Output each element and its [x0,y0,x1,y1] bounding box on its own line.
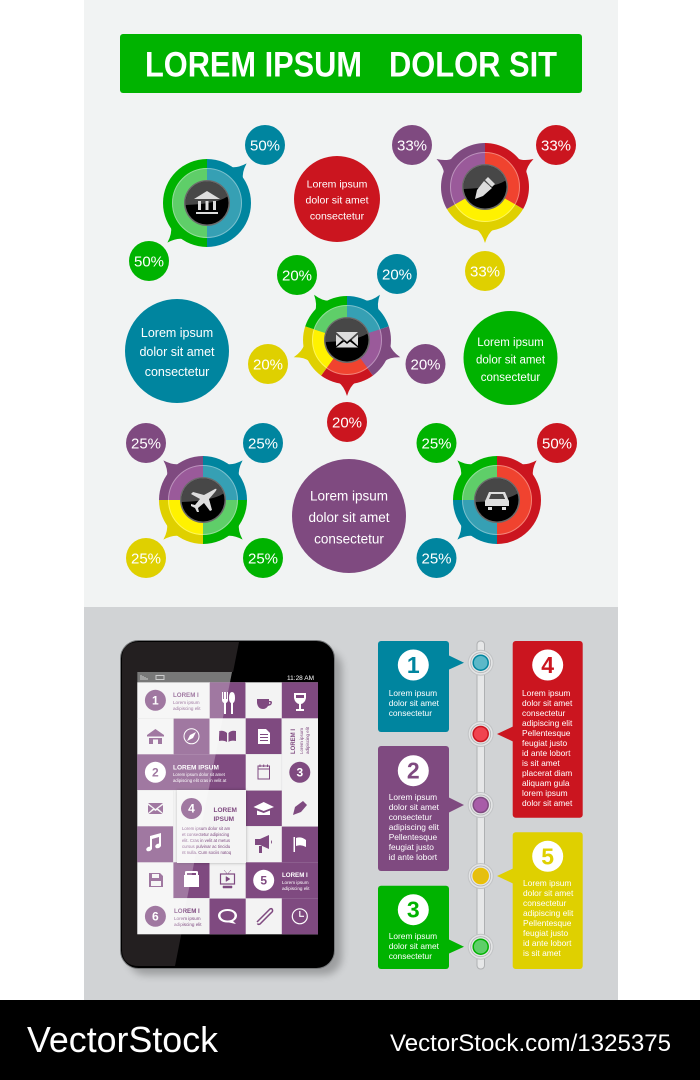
icon: speech bubble [218,909,237,924]
circle: purple text: dolor sit amet [308,510,390,525]
circle: purple text [292,459,406,573]
icon: envelope [336,332,358,348]
card 4: red: feugiat justo [522,738,568,748]
screen tile: 4: elit. Cras in velit at metus [182,838,230,843]
donut: plane 25x4 [157,454,249,546]
circle: green text: Lorem ipsum [477,337,544,349]
card 2: purple: Lorem ipsum [389,792,437,802]
screen tile: 4: cursus pulvinar ac tincidu [182,844,231,849]
card 5: yellow: Lorem ipsum [523,878,571,888]
bubble: 25% green [243,538,283,578]
card 5: yellow: id ante lobort [523,938,572,948]
bubble: 20% teal: 20% [382,266,412,284]
bubble: 50% green: 50% [134,254,164,270]
card 5: yellow: is sit amet [523,948,561,958]
timeline node: red [468,722,493,746]
icon: pen small [293,801,307,815]
bubble: 20% red: 20% [332,414,362,432]
icon: tv [220,870,234,888]
icon: plane [191,489,216,512]
circle: teal text: Lorem ipsum [141,326,213,340]
screen tile: 5: LOREM I [282,872,308,879]
bubble: 25% yellow: 25% [131,550,161,568]
icon: floppy [149,873,163,887]
donut: car 50/25/25 [451,454,543,546]
bubble: 20% red [327,402,367,442]
circle: teal text: dolor sit amet [139,345,215,359]
card 4: red: Pellentesque [522,728,571,738]
icon: graduation cap [254,802,274,815]
screen grid [137,682,318,934]
icon: briefcase [184,871,199,887]
screen tile: 2: 2 [152,766,159,780]
bubble: 33% purple: 33% [397,138,427,154]
card 1: teal [378,641,464,732]
icon: megaphone [255,835,272,853]
screen tile: 5: Lorem ipsum [282,880,309,885]
screen tile: 1: adipiscing elit [173,706,201,711]
bubble: 33% red [536,125,576,165]
screen tile: 1: Lorem ipsum [173,700,200,705]
screen tile: 1 [145,690,201,711]
circle: red text [294,156,380,242]
card 3: green [378,886,464,969]
bubble: 25% teal: 25% [248,436,278,452]
circle: red text: dolor sit amet [305,194,369,206]
icon: book [219,731,236,742]
bubble: 20% yellow: 20% [253,356,283,374]
timeline node: teal [468,650,493,675]
bubble: 20% purple: 20% [410,356,441,374]
screen tile: 2: LOREM IPSUM [173,764,219,772]
title banner: LOREM IPSUM [145,46,362,84]
card 2: purple [378,746,464,871]
icon: music [146,833,161,851]
card 5: yellow: consectetur [523,898,567,908]
icon: bank [194,191,220,214]
bubble: 25% purple: 25% [131,436,161,452]
panel: bottom background [84,607,618,1000]
bubble: 50% teal: 50% [250,138,280,154]
timeline node: green [468,934,493,959]
card 4: red: dolor sit amet [522,798,573,808]
tablet reflection [137,672,232,934]
screen tile: 4: LOREM [214,807,237,814]
card 5: yellow: Pellentesque [523,918,572,928]
bubble: 50% teal [245,125,285,165]
icon: mail small [148,803,163,814]
circle: teal text: consectetur [145,365,209,379]
bubble: 25% purple [126,423,166,463]
screen tile: 6 [145,906,202,927]
card 4: red: consectetur [522,708,566,718]
timeline node: purple [468,792,493,818]
screen tile: 3: Lorem ipsum [299,728,304,754]
icon: calendar [258,764,270,779]
screen tile: 6: LOREM I [174,908,200,915]
icon: compass [184,729,199,744]
card 4: red: is sit amet [522,758,560,768]
icon: paperclip [257,909,273,924]
icon: pen nib [475,177,495,199]
icon: flag [294,837,306,852]
bubble: 20% purple [406,344,446,384]
circle: teal text [125,299,229,403]
screen tile: 2: Lorem ipsum dolor sit amet [173,772,226,777]
bubble: 50% red [537,423,577,463]
card 1: teal: Lorem ipsum [389,688,437,698]
card 4: red: Lorem ipsum [522,688,570,698]
card 5: yellow: 5 [541,843,554,869]
screen tile: 1: LOREM I [173,692,199,699]
screen tile: 3: adipiscing elit [305,726,310,754]
card 1: teal: dolor sit amet [389,698,440,708]
card 4: red: aliquam gula [522,778,570,788]
bubble: 25% teal [243,423,283,463]
donut: bank 50/50 [161,157,253,249]
circle: green text: consectetur [481,372,540,384]
screen tile: 3: LOREM I [291,729,297,754]
card 3: green: 3 [407,897,420,923]
screen tile: 4: et consectetur adipiscing [182,832,230,837]
footer bar: VectorStock [27,1019,219,1060]
screen tile: 4 [177,790,246,863]
screen tile: 6: adipiscing elit [174,922,202,927]
screen tile: 3: 3 [296,766,303,780]
card 5: yellow: feugiat justo [523,928,569,938]
card 3: green: dolor sit amet [389,941,440,951]
card 2: purple: feugiat justo [389,842,434,852]
screen tile: 5: adipiscing elit [282,886,310,891]
card 3: green: Lorem ipsum [389,931,437,941]
bubble: 33% red: 33% [541,138,571,154]
screen icons [146,692,307,924]
bubble: 33% purple [392,125,432,165]
screen tile: 2 [145,762,227,783]
icon: coffee [257,699,272,709]
donut: pen 33/33/33 [432,143,538,243]
card 5: yellow: adipiscing elit [523,908,574,918]
icon: wine glass [294,693,306,711]
bubble: 33% yellow [465,251,505,291]
bubble: 20% green: 20% [282,268,312,284]
footer bar: VectorStock.com/1325375 [390,1030,671,1057]
bubble: 20% green [277,255,317,295]
icon: clock [292,909,307,924]
card 2: purple: 2 [407,758,420,784]
card 3: green: consectetur [389,951,432,961]
title banner: DOLOR SIT [389,46,557,84]
screen tile: 4: 4 [188,802,195,816]
icon: car [485,492,509,510]
screen tile: 5: 5 [260,874,267,888]
card 2: purple: id ante lobort [389,852,438,862]
screen tile: 4: Lorem ipsum dolor sit am [182,826,231,831]
bubble: 25% teal [416,538,456,578]
card 4: red: placerat diam [522,768,572,778]
timeline node: yellow [468,864,493,888]
tablet shadow [128,650,342,975]
bubble: 20% yellow [248,344,288,384]
screen tile: 6: 6 [152,910,159,924]
card 4: red: id ante lobort [522,748,571,758]
donut: mail 20x5 [291,289,403,396]
card 5: yellow: dolor sit amet [523,888,574,898]
title banner [120,34,582,93]
circle: purple text: consectetur [314,532,384,546]
card 1: teal: consectetur [389,708,432,718]
bubble: 25% yellow [126,538,166,578]
tablet [120,640,334,968]
icon: document [258,729,270,744]
bubble: 50% green [129,241,169,281]
status bar [137,672,318,682]
card 4: red: lorem ipsum [522,788,568,798]
screen tile: 4: IPSUM [214,816,234,823]
icon: home [147,729,164,744]
bubble: 25% green: 25% [248,550,278,568]
circle: red text: Lorem ipsum [307,178,368,190]
circle: red text: consectetur [310,210,365,222]
panel: top background [84,0,618,607]
icon: cutlery [222,692,235,714]
screen tile: 5 [253,870,310,891]
card 2: purple: consectetur [389,812,432,822]
bubble: 25% teal: 25% [421,550,452,568]
card 2: purple: Pellentesque [389,832,437,842]
screen tile: 2: adipiscing elit cras in velit at [173,778,227,783]
card 4: red [497,641,583,818]
circle: green text [464,311,558,405]
circle: purple text: Lorem ipsum [310,488,388,504]
timeline rail [477,641,484,969]
card 4: red: dolor sit amet [522,698,573,708]
card 2: purple: adipiscing elit [389,822,440,832]
circle: green text: dolor sit amet [476,354,546,366]
screen tile: 4: nt nulla. Cum sociis natoq [182,850,232,855]
bubble: 20% teal [377,254,417,294]
card 4: red: 4 [541,652,554,678]
bubble: 25% green: 25% [421,436,452,452]
card 2: purple: dolor sit amet [389,802,440,812]
bubble: 25% green [416,423,456,463]
card 1: teal: 1 [407,652,420,678]
card 4: red: adipiscing elit [522,718,573,728]
footer bar [0,1000,700,1080]
status bar: 11:28 AM [287,675,314,682]
bubble: 33% yellow: 33% [470,264,500,280]
bubble: 50% red: 50% [542,436,572,452]
screen tile: 3 [289,726,310,783]
screen tile: 6: Lorem ipsum [174,916,201,921]
screen tile: 1: 1 [152,694,159,708]
card 5: yellow [497,832,583,969]
